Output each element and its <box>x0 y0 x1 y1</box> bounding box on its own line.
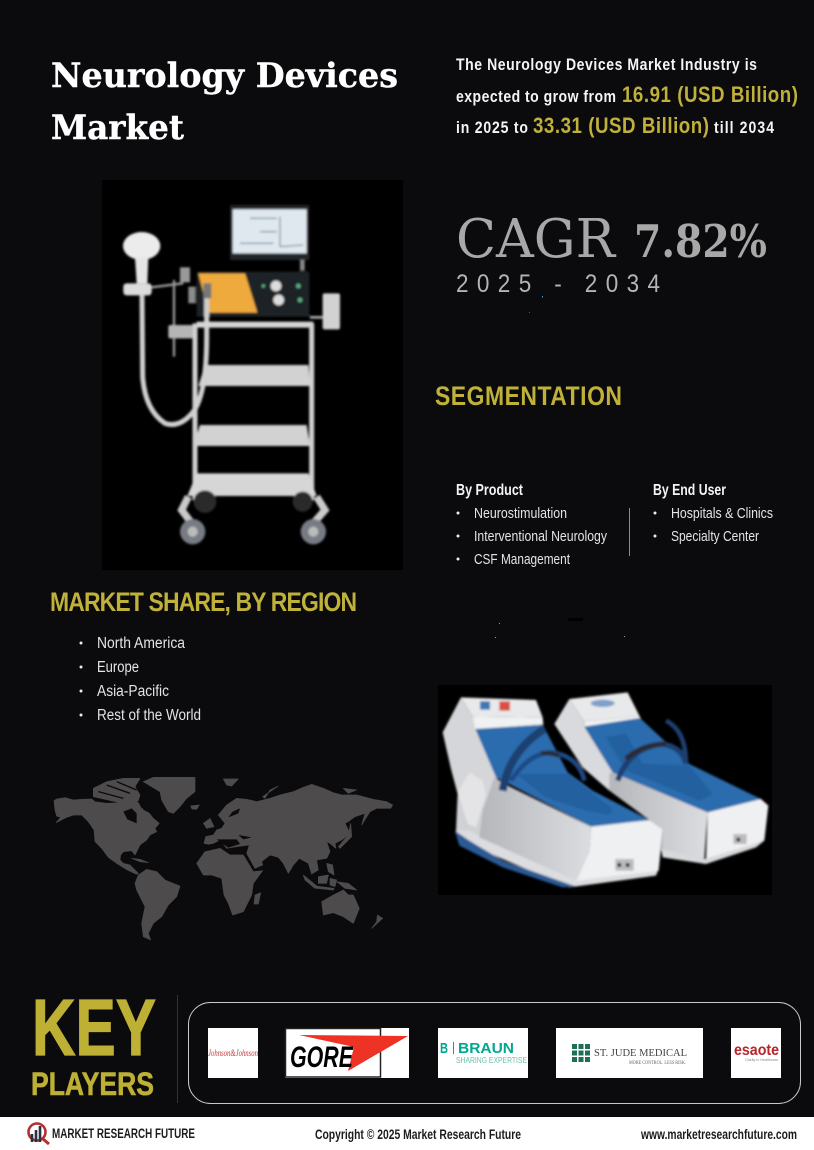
region list: Europe <box>97 659 139 676</box>
world map <box>54 777 393 940</box>
heading: market share by region: MARKET SHARE, BY REGION <box>50 587 357 617</box>
market growth summary: 16.91 (USD Billion) <box>622 84 798 107</box>
heading: segmentation: SEGMENTATION <box>435 381 622 411</box>
heading: key players: PLAYERS <box>31 1066 154 1102</box>
segment list: by end user: Specialty Center <box>671 529 759 545</box>
segment list: by product: Interventional Neurology <box>474 529 608 545</box>
brand name: MARKET RESEARCH FUTURE <box>52 1126 195 1141</box>
heading: key players: KEY <box>32 983 156 1072</box>
product photo: foot therapy devices <box>438 685 772 895</box>
region list: Rest of the World <box>97 707 201 724</box>
footer bar <box>0 1117 814 1150</box>
logo: B. Braun: SHARING EXPERTISE <box>456 1055 527 1065</box>
logo: B. Braun: BRAUN <box>458 1040 514 1057</box>
copyright: Copyright © 2025 Market Research Future <box>315 1127 521 1142</box>
title <box>51 56 398 148</box>
logo: Esaote <box>731 1028 781 1078</box>
region list: North America <box>97 635 185 652</box>
logo: Esaote: Clarity in Healthcare <box>745 1057 779 1062</box>
market growth summary: expected to grow from <box>456 88 616 106</box>
product photo: neurostimulation cart <box>102 180 403 570</box>
segment list: by end user: By End User <box>653 482 726 499</box>
logo: Johnson & Johnson <box>208 1028 258 1078</box>
key players panel <box>188 1002 800 1104</box>
segment list: by product: By Product <box>456 482 523 499</box>
CAGR figure: CAGR <box>456 209 617 270</box>
icon: magnifier logo <box>28 1124 49 1144</box>
segment list: by product: CSF Management <box>474 552 570 568</box>
CAGR figure: 2025 - 2034 <box>456 270 660 298</box>
CAGR figure: 7.82% <box>634 215 767 268</box>
logo: Esaote: esaote <box>734 1042 779 1059</box>
region list <box>80 635 201 724</box>
segment list: by end user <box>653 482 773 545</box>
logo: Johnson & Johnson: Johnson&Johnson <box>208 1048 258 1058</box>
market growth summary <box>456 56 798 138</box>
logo: B. Braun: B <box>440 1040 448 1057</box>
heading: key players <box>31 983 156 1102</box>
logo: St. Jude Medical: MORE CONTROL. LESS RISK. <box>629 1061 686 1066</box>
market growth summary: 33.31 (USD Billion) <box>533 115 709 138</box>
CAGR figure <box>456 209 767 298</box>
logo: St. Jude Medical <box>556 1028 703 1078</box>
region list: Asia-Pacific <box>97 683 169 700</box>
segment list: by end user: Hospitals & Clinics <box>671 506 773 522</box>
segment list: by product <box>456 482 608 568</box>
title: Neurology Devices <box>51 56 398 96</box>
segment list: by product: Neurostimulation <box>474 506 567 522</box>
market growth summary: till 2034 <box>714 119 774 137</box>
logo: Gore <box>285 1028 409 1078</box>
title: Market <box>51 108 184 148</box>
logo: St. Jude Medical: ST. JUDE MEDICAL <box>594 1047 687 1059</box>
market growth summary: in 2025 to <box>456 119 528 137</box>
logo: B. Braun <box>438 1028 528 1078</box>
market growth summary: The Neurology Devices Market Industry is <box>456 56 757 74</box>
logo: Gore: GORE <box>290 1041 354 1074</box>
